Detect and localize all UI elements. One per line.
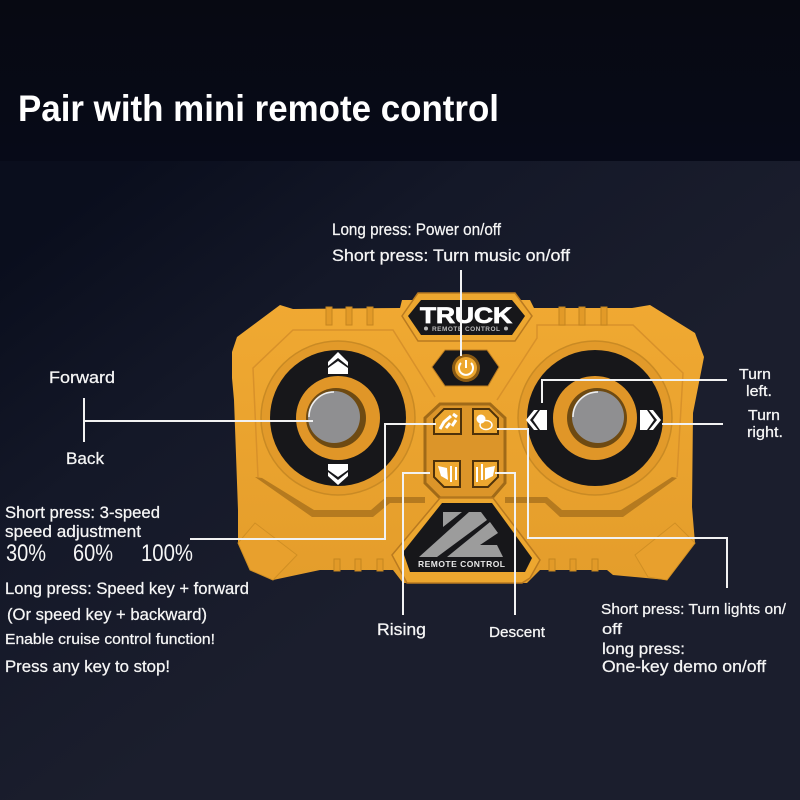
label: speed and cruise control: Press any key to stop! — [5, 657, 170, 676]
label: rising: Rising — [377, 620, 426, 639]
label: lights and demo — [601, 601, 787, 676]
truck badge — [402, 293, 532, 341]
label: descent: Descent — [489, 624, 546, 641]
label: speed and cruise control: 60% — [73, 540, 113, 567]
lower groove right — [505, 477, 677, 517]
speed key — [434, 409, 461, 434]
rising key — [434, 461, 460, 487]
label: speed and cruise control: 100% — [141, 540, 193, 567]
descent key — [473, 461, 498, 487]
label: turn right: right. — [747, 424, 783, 441]
label: power: Long press: Power on/off — [332, 220, 501, 239]
logo mark — [419, 512, 503, 557]
arrow down — [328, 464, 348, 485]
label: lights and demo: Short press: Turn lights on/ — [601, 601, 787, 618]
arrow left — [526, 410, 547, 430]
function key panel — [425, 404, 505, 498]
label: back: Back — [66, 449, 104, 468]
lights key — [473, 409, 498, 434]
title band — [0, 0, 800, 161]
leader lines — [84, 270, 727, 615]
label: lights and demo: off — [602, 621, 623, 638]
label: lights and demo: One-key demo on/off — [602, 657, 766, 676]
lower groove left — [255, 477, 425, 517]
remote control body — [232, 293, 704, 583]
label: speed and cruise control: speed adjustment — [5, 522, 141, 541]
shell bevel lines — [253, 325, 683, 477]
truck badge: REMOTE CONTROL — [432, 326, 500, 333]
label: turn right: Turn — [748, 407, 780, 424]
label: turn left — [739, 366, 772, 400]
label: speed and cruise control: Short press: 3-speed — [5, 503, 160, 522]
label: turn left: left. — [746, 383, 772, 400]
label: speed and cruise control: 30% — [6, 540, 46, 567]
label: lights and demo: long press: — [602, 641, 685, 658]
label: speed and cruise control: Enable cruise control function! — [5, 631, 215, 648]
body shell — [232, 300, 704, 583]
corner bumper bottom right — [635, 523, 695, 580]
label: turn left: Turn — [739, 366, 771, 383]
label: speed and cruise control — [5, 503, 249, 676]
power button — [432, 350, 499, 386]
right joystick — [518, 341, 672, 495]
label: turn right — [747, 407, 783, 441]
logo badge: REMOTE CONTROL — [418, 559, 505, 569]
label: speed and cruise control: (Or speed key + backward) — [7, 605, 207, 624]
truck badge: TRUCK — [420, 303, 512, 328]
arrow right — [640, 410, 661, 430]
arrow up — [328, 352, 348, 374]
title: Pair with mini remote control — [18, 88, 499, 129]
label: forward: Forward — [49, 368, 115, 387]
logo badge — [392, 498, 540, 583]
left joystick — [261, 341, 415, 495]
top ridges — [326, 307, 607, 571]
label: power — [332, 220, 570, 265]
corner bumper bottom left — [238, 523, 297, 580]
label: speed and cruise control: Long press: Speed key + forward — [5, 579, 249, 598]
label: power: Short press: Turn music on/off — [332, 246, 570, 265]
